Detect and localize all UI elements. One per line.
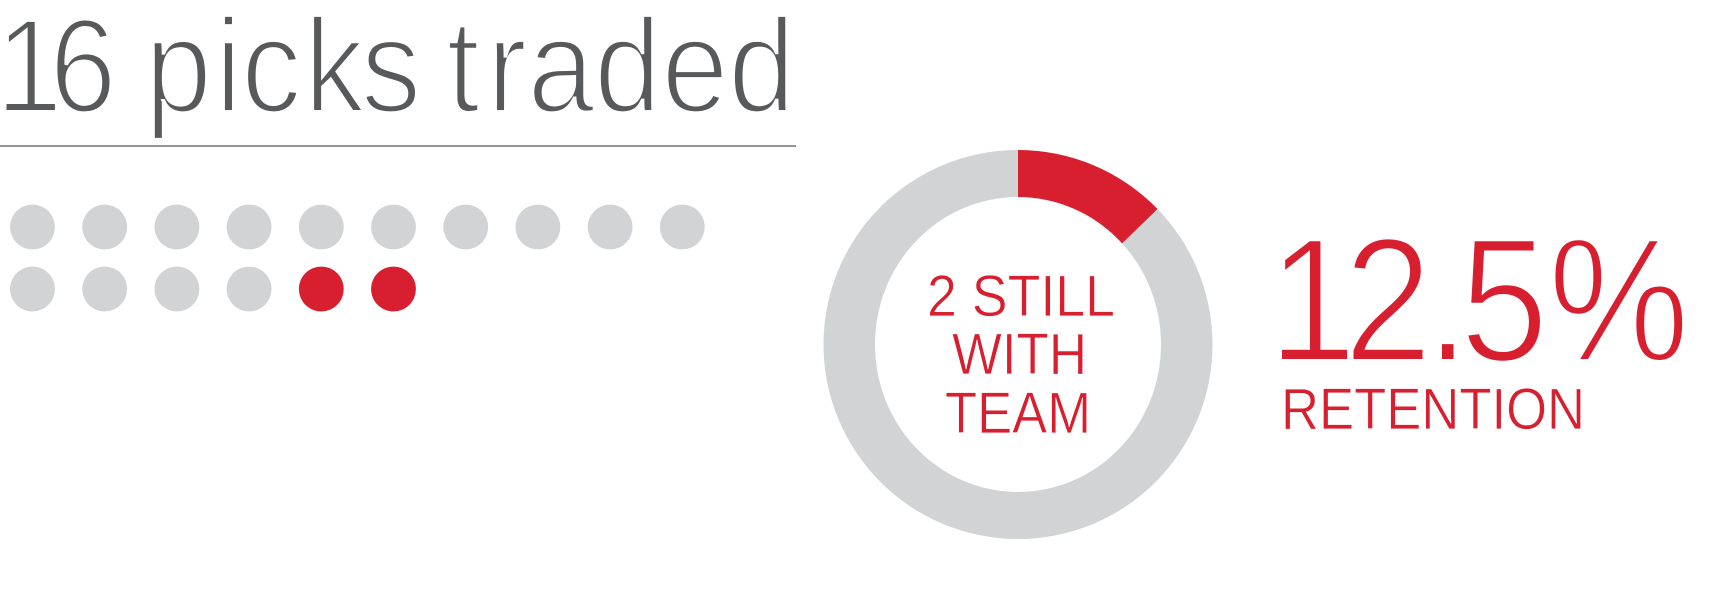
title: [0, 0, 795, 141]
retention percentage: 5: [1460, 201, 1548, 399]
donut chart: [824, 150, 1212, 539]
retention percentage: [1268, 201, 1690, 399]
retention label: RETENTION: [1281, 377, 1585, 442]
retention percentage: 2: [1344, 201, 1432, 399]
retention percentage: 1: [1268, 201, 1357, 399]
donut centre label: 2 STILL: [927, 264, 1115, 329]
dot row: 16 picks, 2 in red: [10, 205, 705, 311]
donut centre label: [927, 264, 1115, 446]
retention percentage: %: [1548, 201, 1690, 399]
donut centre label: WITH: [952, 322, 1087, 387]
donut red segment: 12.5%: [1018, 150, 1158, 344]
donut centre label: TEAM: [945, 381, 1091, 446]
retention percentage: .: [1426, 201, 1470, 399]
